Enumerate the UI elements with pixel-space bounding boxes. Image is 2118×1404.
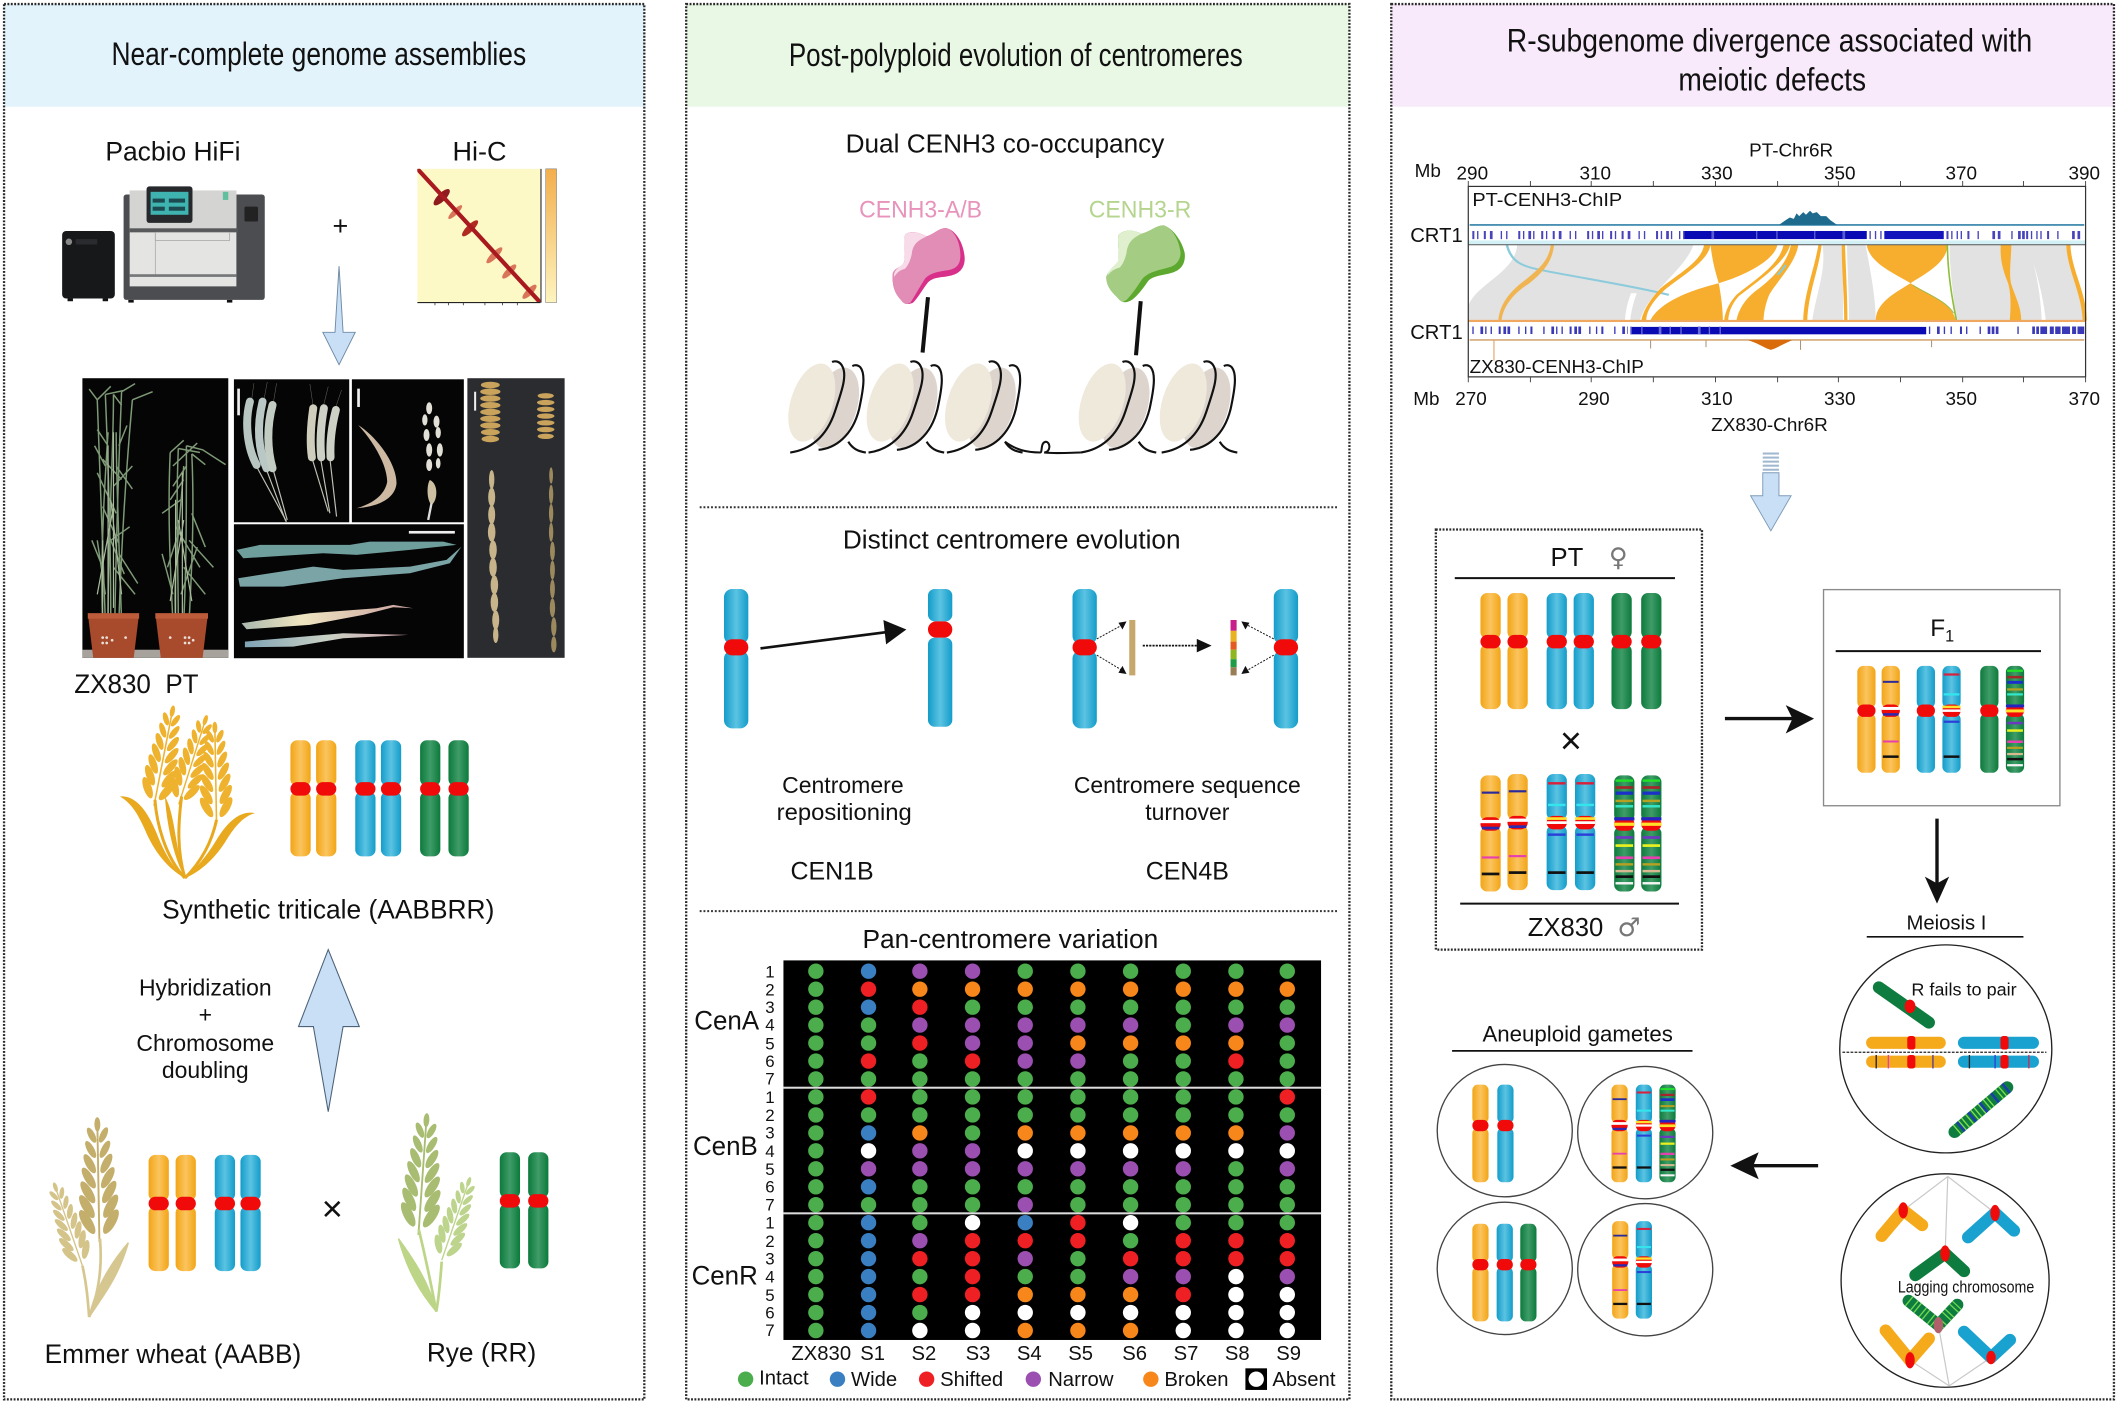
arrow: meiosis to gametes [1730,1152,1818,1179]
chart axis: ZX830-Chr6R: ZX830-Chr6R [1711,415,1828,436]
chart axis: ZX830-Chr6R: 290 [1578,389,1610,410]
nucleosome array [779,358,1240,454]
sequence bar: after turnover [1231,620,1274,675]
row numbers: 2 [765,981,775,1000]
legend: Intact [759,1368,809,1390]
box: F1 [1824,590,2060,806]
photo: spike detail [352,379,464,522]
label: CENH3-A/B: CENH3-A/B [859,196,982,223]
arrow: repositioning [760,620,906,648]
label: synthetic triticale: Synthetic triticale (AABBRR) [162,895,494,925]
text: centromere sequence turnover: Centromere sequence [1074,772,1301,798]
text: centromere repositioning: Centromere [782,772,904,798]
row numbers: 3 [765,1124,775,1143]
gamete: banded A and B [1578,1204,1713,1336]
row numbers: 7 [765,1195,775,1214]
chart axis: ZX830-Chr6R: 270 [1455,389,1487,410]
text: hybridization and chromosome doubling: Chromosome [136,1030,274,1056]
symbol: male: ♂ [1618,913,1641,943]
heading: post-polyploid evolution: Post-polyploid evolution of centromeres [789,37,1243,73]
chromosome: before turnover [1073,589,1097,728]
text: centromere repositioning: repositioning [777,799,912,825]
group labels [692,1005,759,1291]
triticale chromosomes [290,740,469,856]
symbol: plus: + [333,211,348,241]
legend: Absent [1272,1369,1336,1391]
row numbers: 7 [765,1321,775,1340]
icon: CENH3-R protein [1106,225,1185,302]
chromosome: after turnover [1274,589,1298,728]
chart axis: PT-Chr6R: 350 [1824,164,1856,185]
label: CENH3-R: CENH3-R [1089,196,1191,223]
icon: triticale wheat [120,702,255,878]
column labels: ZX830 [791,1343,851,1365]
emmer chromosomes [149,1155,261,1271]
track: upper CRT1 [1472,231,2084,239]
text: centromere sequence turnover [1074,772,1301,825]
column labels: S3 [966,1343,990,1365]
group labels: CenA [694,1005,759,1035]
label: Meiosis I: Meiosis I [1906,912,1986,934]
chart axis: ZX830-Chr6R: 350 [1946,389,1977,410]
chart axis: PT-Chr6R: 330 [1701,164,1733,185]
row numbers: 4 [765,1016,775,1035]
legend: Narrow [1048,1369,1114,1391]
chromosome: repositioned [928,589,952,727]
track: ZX830 ChIP [1470,340,2084,361]
column labels: S7 [1174,1343,1198,1365]
column labels: S9 [1276,1343,1301,1365]
ZX830 chromosomes [1480,774,1661,892]
chart: synteny ribbons with CENH3 ChIP and CRT1 tracks [1468,186,2087,377]
track: lower CRT1 [1472,327,2084,334]
row numbers: 3 [765,1249,775,1268]
panel: R-subgenome divergence [1391,4,2114,1399]
label: Pacbio HiFi: Pacbio HiFi [105,137,240,167]
track: PT ChIP [1470,211,2084,225]
column labels: S1 [860,1343,885,1365]
PT chromosomes [1480,593,1661,709]
chromosome pairs separating [1882,1210,2014,1360]
label: PT female: PT [1550,544,1584,572]
row numbers: 3 [765,998,775,1017]
text: hybridization and chromosome doubling: doubling [162,1057,249,1083]
labels: CRT1: CRT1 [1410,322,1463,344]
label: rye: Rye (RR) [427,1338,536,1368]
chart axis: PT-Chr6R: 390 [2068,164,2100,185]
row numbers: 4 [765,1142,775,1161]
row numbers: 4 [765,1268,775,1287]
arrow: turnover [1143,639,1212,652]
labels: CRT1: CRT1 [1410,225,1463,247]
icon: sequencing machine [62,186,265,303]
subheading: distinct centromere evolution: Distinct centromere evolution [843,524,1181,554]
label: F1: F [1930,615,1945,642]
label: emmer wheat: Emmer wheat (AABB) [45,1339,301,1369]
chart: pan-centromere dot matrix [783,960,1321,1340]
chart axis: ZX830-Chr6R: Mb [1413,389,1440,410]
icon: emmer wheat [38,1117,128,1317]
photo: spikes [234,379,349,522]
label: CEN4B: CEN4B [1146,857,1229,885]
chart axis: ZX830-Chr6R: 330 [1824,389,1856,410]
ribbons [1468,243,2087,321]
legend: Shifted [940,1369,1003,1391]
text: hybridization and chromosome doubling: + [199,1002,212,1028]
heading: R-subgenome divergence: R-subgenome divergence associated with [1507,22,2032,58]
column labels: S6 [1122,1343,1147,1365]
cell: lagging chromosome [1841,1174,2049,1387]
arrow: striped down arrow [1751,453,1791,531]
banded unpaired chromosome [1955,1087,2007,1132]
text: hybridization and chromosome doubling: Hybridization [139,975,272,1001]
arrow: sequencing to plants [323,266,355,365]
icon: rye [396,1112,486,1312]
legend: Broken [1164,1369,1229,1391]
box: parental chromosomes [1436,530,1702,950]
chart axis: PT-Chr6R: 290 [1457,164,1488,185]
chromosome: before repositioning [724,589,748,728]
row numbers: 2 [765,1232,775,1251]
label: ZX830 male: ZX830 [1528,914,1603,942]
row numbers: 5 [765,1286,775,1305]
symbol: cross: × [322,1188,343,1229]
row numbers: 6 [765,1178,775,1197]
group labels: CenB [693,1131,758,1161]
heading: near-complete genome assemblies: Near-complete genome assemblies [111,36,526,72]
row numbers: 2 [765,1106,775,1125]
row numbers: 5 [765,1160,775,1179]
row numbers: 5 [765,1035,775,1054]
gamete: A, B and R [1437,1202,1572,1335]
heading: R-subgenome divergence: meiotic defects [1678,62,1866,98]
heading: R-subgenome divergence [1507,22,2032,98]
legend: Wide [851,1369,897,1391]
rye chromosomes [500,1152,548,1268]
label: PT ChIP: PT-CENH3-ChIP [1472,189,1622,210]
icon: CENH3-A/B protein [893,228,965,304]
column labels: S5 [1068,1343,1093,1365]
photo: whole plants [82,378,228,658]
label: lagging chromosome: Lagging chromosome [1898,1279,2034,1297]
connector bars [923,297,1141,355]
subheading: pan-centromere variation: Pan-centromere variation [862,924,1158,954]
row numbers: 6 [765,1052,775,1071]
labels: CRT1 [1410,225,1463,344]
gamete: A and B [1437,1064,1572,1197]
panel: near-complete genome assemblies [4,4,644,1399]
row numbers: 1 [765,962,775,981]
row numbers: 6 [765,1303,775,1322]
row numbers: 7 [765,1070,775,1089]
label: aneuploid gametes: Aneuploid gametes [1482,1021,1673,1046]
text: centromere sequence turnover: turnover [1145,799,1230,825]
paired chromosomes [1872,987,2033,1062]
row numbers [765,962,775,1340]
label: ZX830 ChIP: ZX830-CENH3-ChIP [1470,356,1644,377]
column labels [791,1343,1301,1365]
panel: post-polyploid evolution of centromeres [686,4,1349,1399]
chart: Hi-C contact map [417,169,557,305]
gamete: banded A, B and R [1578,1066,1713,1199]
chart axis: PT-Chr6R: 370 [1946,164,1977,185]
cell: R fails to pair [1840,945,2052,1153]
text: hybridization and chromosome doubling [136,975,274,1083]
column labels: S8 [1225,1343,1250,1365]
arrow: hybridization up [299,950,359,1112]
label: ZX830 PT: ZX830 PT [74,669,199,699]
label: R fails to pair: R fails to pair [1911,980,2017,1000]
chart axis: ZX830-Chr6R: 370 [2068,389,2100,410]
text: centromere repositioning [777,772,912,825]
chart axis: ZX830-Chr6R: 310 [1701,389,1733,410]
arrow: cross to F1 [1725,705,1814,733]
F1 chromosomes [1857,666,2024,773]
chart axis: PT-Chr6R [1415,141,2100,186]
label: Hi-C: Hi-C [453,137,507,167]
subheading: dual CENH3: Dual CENH3 co-occupancy [846,129,1165,159]
label: F1: 1 [1945,628,1954,646]
row numbers: 1 [765,1088,775,1107]
photo: leaves [234,524,464,658]
label: CEN1B: CEN1B [790,857,874,885]
symbol: cross: × [1560,721,1582,763]
legend [738,1368,1336,1391]
row numbers: 1 [765,1214,775,1233]
photo: grains [467,378,565,658]
chart axis: PT-Chr6R: Mb [1415,161,1441,182]
symbol: female: ♀ [1609,543,1628,573]
sequence bar: before turnover [1097,620,1135,675]
column labels: S4 [1017,1343,1042,1365]
arrow: F1 to meiosis [1925,819,1949,904]
group labels: CenR [692,1261,758,1291]
chart axis: PT-Chr6R: 310 [1579,164,1611,185]
chart axis: PT-Chr6R: PT-Chr6R [1749,141,1833,162]
column labels: S2 [912,1343,936,1365]
chart axis: ZX830-Chr6R [1413,377,2100,436]
